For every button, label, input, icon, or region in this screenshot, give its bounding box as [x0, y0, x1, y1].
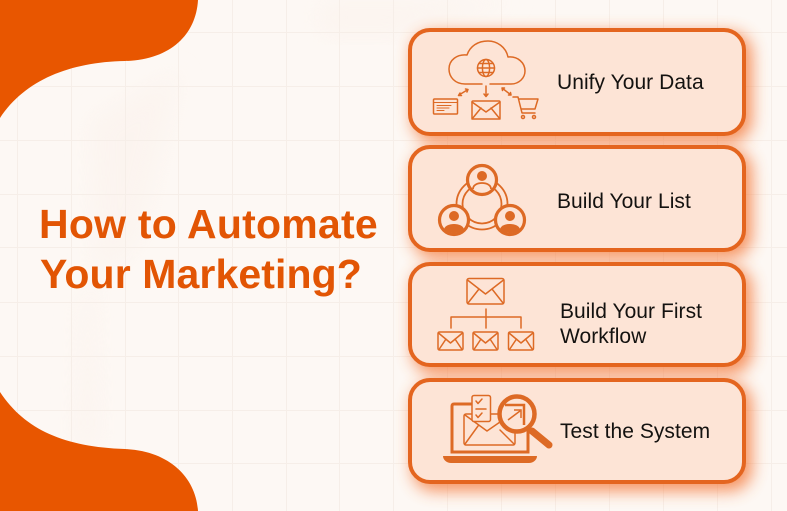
label: build your first workflow: Build Your First	[560, 300, 702, 323]
label: build your first workflow: Workflow	[560, 325, 647, 348]
panel: unify your data	[410, 30, 752, 142]
title: Your Marketing?	[40, 251, 362, 297]
panel: build your first workflow	[410, 264, 752, 374]
icon: connected people	[440, 166, 524, 234]
title	[39, 201, 378, 297]
label: unify your data: Unify Your Data	[557, 71, 704, 94]
decorative blob: bottom left	[0, 392, 198, 511]
label: build your first workflow	[560, 300, 702, 348]
panel: build your list	[410, 147, 752, 258]
icon: laptop with magnifier	[443, 396, 549, 463]
icon: cloud network	[434, 41, 538, 119]
label: build your list: Build Your List	[557, 190, 691, 213]
decorative blob: top left	[0, 0, 198, 118]
title: How to Automate	[39, 201, 378, 247]
panel: test the system	[410, 380, 752, 491]
icon: email workflow	[438, 278, 534, 350]
label: test the system: Test the System	[560, 420, 710, 443]
